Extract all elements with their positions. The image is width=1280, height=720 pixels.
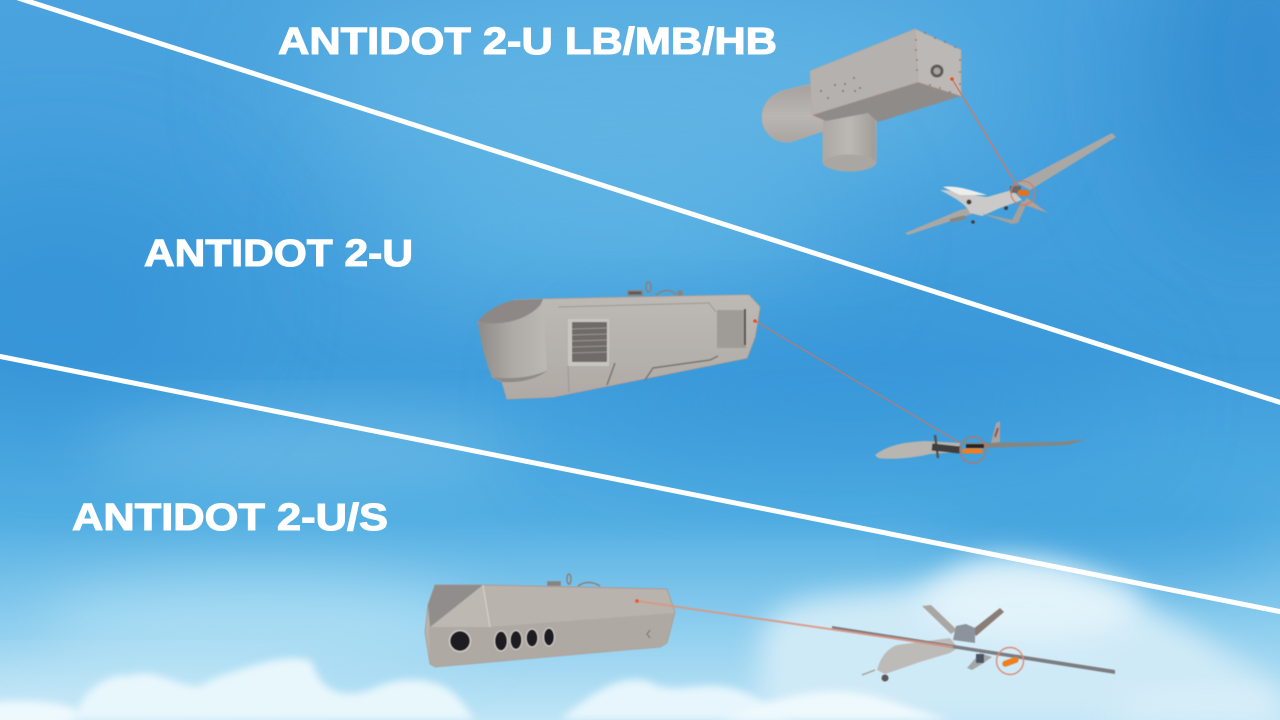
orange target <box>962 448 983 454</box>
drone: bottom <box>635 599 1115 682</box>
heading: ANTIDOT 2-U LB/MB/HB: ANTIDOT 2-U LB/MB/HB <box>278 21 777 63</box>
rivets <box>820 32 961 99</box>
panel outline <box>558 303 716 392</box>
nose gear <box>882 674 888 682</box>
tail booms <box>922 605 957 634</box>
drone: middle <box>875 421 1087 463</box>
sensor: small ports <box>494 628 554 651</box>
right wing <box>1017 133 1116 190</box>
pod: ANTIDOT 2-U/S <box>425 574 675 667</box>
clouds <box>0 557 1280 720</box>
heading: ANTIDOT 2-U: ANTIDOT 2-U <box>144 233 413 275</box>
nose <box>478 299 543 324</box>
divider line: lower <box>0 356 1280 612</box>
box side panel <box>810 29 918 115</box>
engine details <box>950 186 1021 224</box>
top hardware <box>548 574 600 586</box>
orange target <box>1001 656 1019 668</box>
wing <box>832 626 1115 674</box>
v-tail <box>980 201 1027 224</box>
orange target <box>1018 190 1029 196</box>
laser: middle pod to drone <box>753 319 960 443</box>
box end panel <box>915 29 961 96</box>
intake vent <box>568 319 609 366</box>
top hardware <box>628 282 682 295</box>
sensor: large port <box>450 630 470 652</box>
fuselage <box>877 638 958 674</box>
side mark <box>647 630 650 638</box>
main body <box>425 585 675 667</box>
lens <box>930 64 944 78</box>
target ring <box>1011 181 1035 205</box>
dark fuselage section <box>966 444 984 448</box>
box underside <box>812 82 961 122</box>
left wing <box>905 207 975 235</box>
fuselage <box>940 190 1022 216</box>
rear vent <box>717 309 746 348</box>
lower band <box>429 613 674 667</box>
wing <box>958 439 1087 448</box>
drone: top <box>905 133 1116 235</box>
heading: ANTIDOT 2-U/S: ANTIDOT 2-U/S <box>72 497 388 539</box>
laser: top pod to drone <box>950 77 1017 186</box>
divider line: upper <box>18 0 1280 403</box>
fuselage <box>875 441 960 459</box>
tail fin <box>991 421 1000 443</box>
main body <box>478 295 760 399</box>
nose probe <box>862 670 875 675</box>
vertical cylinder <box>823 112 876 172</box>
horizontal cylinder <box>762 84 826 142</box>
engine <box>935 435 938 458</box>
target ring <box>996 648 1024 674</box>
target ring <box>960 437 986 463</box>
lower panel line <box>607 356 718 385</box>
nose facets <box>428 585 483 627</box>
laser: bottom pod to drone <box>635 599 953 647</box>
pylon pod <box>967 653 992 670</box>
pod: ANTIDOT 2-U LB/MB/HB <box>762 29 961 172</box>
pod: ANTIDOT 2-U <box>478 282 760 399</box>
